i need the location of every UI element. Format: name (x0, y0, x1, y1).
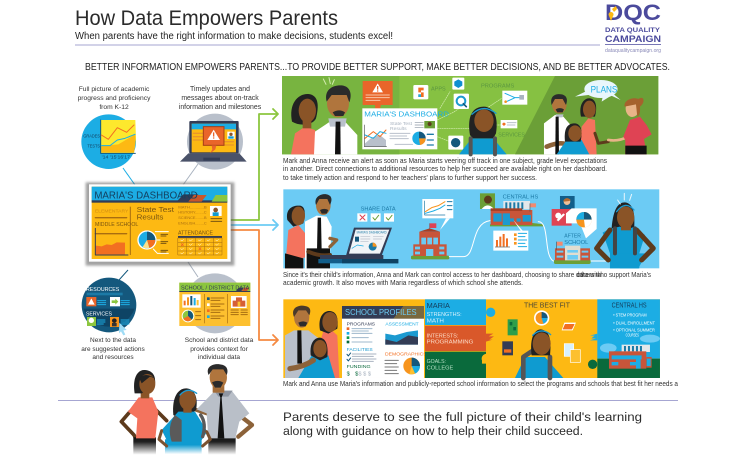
girl Maria (459, 107, 507, 154)
dashboard: Maria's dashboard: State Test (137, 205, 175, 214)
laptop (318, 228, 398, 263)
panel 1 caption: Mark and Anna receive an alert as soon as Maria starts veering off track in one subject, grade level expectations (283, 156, 607, 165)
dashboard: Maria's dashboard: SCIENCE........B (178, 216, 207, 220)
central hs profile: • STEM PROGRAM (613, 312, 647, 317)
central hs (480, 193, 543, 226)
share data (357, 207, 396, 222)
laptop: MARIA'S DASHBOARD (357, 231, 387, 235)
Maria profile puzzle pieces: COLLEGE (427, 365, 454, 371)
panel 2 caption: Since it's their child's information, Anna and Mark can control access to her dashboard, choosing to share data with (283, 270, 601, 279)
panel 3: school profiles and best fit (283, 299, 660, 378)
school profiles: SCHOOL PROFILES (345, 308, 417, 317)
icon: school district data (179, 273, 250, 333)
dashboard: Maria's dashboard: MIDDLE SCHOOL (95, 222, 138, 228)
school profiles: PROGRAMS (347, 321, 376, 327)
Maria profile puzzle pieces: INTERESTS: (427, 333, 458, 339)
icon: grades and tests chart: TESTS (87, 144, 100, 149)
resource icons (413, 78, 527, 150)
after school (552, 196, 597, 264)
girl (159, 388, 210, 455)
panel 1 caption (283, 156, 607, 182)
icon: resources and services: SERVICES (86, 311, 112, 317)
text: timely updates: Timely updates and (190, 86, 250, 93)
family illustration (121, 364, 252, 456)
resource labels (431, 84, 525, 138)
school profiles: $$ (347, 371, 359, 377)
icon: grades and tests chart (81, 114, 136, 169)
the best fit: THE BEST FIT (524, 303, 571, 310)
logo: Data Quality Campaign: CAMPAIGN (605, 34, 661, 44)
after school: SCHOOL (564, 240, 588, 246)
connector lines (119, 164, 198, 280)
icon: resources and services: RESOURCES (86, 287, 120, 293)
icon: grades and tests chart: GRADES (83, 134, 100, 139)
parents at laptop (285, 194, 337, 268)
panel 3 caption: Mark and Anna use Maria's information and publicly-reported school information to select the programs and schools that best fit her needs a (283, 379, 678, 388)
resource labels: APPS (431, 87, 446, 93)
text: full picture: Full picture of academic (79, 86, 150, 93)
speech bubble plans: PLANS (591, 84, 617, 94)
Maria profile puzzle pieces: GOALS: (427, 359, 446, 365)
text: timely updates: messages about on-track (181, 95, 259, 102)
text: school and district: provides context for (190, 346, 249, 353)
subtitle: When parents have the right information to make decisions, students excel! (75, 31, 393, 42)
closing statement: along with guidance on how to help their child succeed. (283, 424, 583, 438)
dashboard: Maria's dashboard: ATTENDANCE (178, 230, 213, 236)
dashboard: Maria's dashboard (86, 182, 234, 266)
panel 2 caption: others who support Maria's (577, 270, 651, 279)
text: full picture (78, 86, 151, 111)
dashboard: Maria's dashboard: MARIA'S DASHBOARD (94, 191, 198, 202)
arrow: orange to panel 3 (231, 230, 278, 345)
heading: better information: BETTER INFORMATION EMPOWERS PARENTS...TO PROVIDE BETTER SUPPORT, MAKE BETTER DECISIONS, AND BE BETTER ADVOCATES. (85, 62, 670, 73)
logo: Data Quality Campaign: dataqualitycampaign.org (605, 48, 661, 54)
panel 1 caption: to take timely action and respond to her teachers' plans to further support her success. (283, 173, 537, 182)
dashboard card: Results (390, 126, 407, 132)
closing statement (283, 410, 642, 438)
dashboard: Maria's dashboard: ENGLISH........C (178, 221, 207, 225)
icon: resources and services (82, 278, 136, 335)
central hs profile: • DUAL ENROLLMENT (613, 320, 655, 325)
the best fit (502, 303, 580, 378)
text: timely updates: information and milestones (179, 104, 262, 111)
school profiles (342, 306, 427, 378)
Maria profile puzzle pieces: PROGRAMMING (427, 339, 473, 345)
girl hands on hips (597, 193, 653, 268)
panel 1: alert and resources (282, 76, 658, 154)
title: How Data Empowers Parents (75, 7, 338, 30)
alert card (363, 81, 393, 130)
share data: SHARE DATA (361, 207, 396, 213)
man (197, 364, 252, 456)
icon: school district data: SCHOOL / DISTRICT DATA (181, 285, 250, 291)
woman Anna (291, 94, 320, 154)
text: timely updates (179, 86, 262, 111)
man Mark (314, 85, 357, 154)
dashboard: Maria's dashboard: Results (137, 212, 164, 221)
panel 1 caption: in another. Direct connections to additional resources to help her succeed are available right on her dashboard. (283, 164, 607, 173)
text: next to the data: and resources (92, 354, 134, 361)
resource labels: SERVICES (498, 132, 525, 138)
central hs profile (588, 299, 660, 378)
school profiles: FUNDING (347, 364, 371, 370)
text: next to the data (81, 337, 146, 361)
dashboard card: MARIA'S DASHBOARD (364, 109, 449, 118)
Maria profile puzzle pieces: MATH (427, 318, 444, 324)
chart bubble (422, 199, 453, 230)
parents and girl (285, 306, 339, 378)
family with teacher (544, 94, 652, 154)
speech bubble plans (575, 80, 621, 102)
after school: AFTER (564, 234, 581, 240)
text: school and district (185, 337, 254, 361)
elementary school building (411, 223, 449, 259)
central hs profile: • OPTIONAL SUMMER (613, 327, 655, 332)
text: full picture: progress and proficiency (78, 95, 151, 102)
school profiles: DEMOGRAPHICS (385, 351, 427, 357)
data card (493, 220, 528, 251)
dashboard card (362, 108, 449, 149)
Maria profile puzzle pieces (425, 299, 495, 378)
text: next to the data: Next to the data (90, 337, 136, 344)
text: full picture: from K-12 (99, 104, 129, 111)
Maria profile puzzle pieces: MARIA (427, 301, 450, 310)
school profiles: FACILITIES (347, 347, 373, 353)
panel 2 caption (283, 270, 651, 287)
resource labels: PROGRAMS (481, 84, 515, 90)
school profiles: $$$ (358, 371, 372, 377)
dashboard: Maria's dashboard: ELEMENTARY (95, 208, 128, 213)
logo: Data Quality Campaign (605, 0, 661, 54)
Maria profile puzzle pieces: STRENGTHS: (427, 312, 462, 318)
central hs: CENTRAL HS (503, 194, 539, 200)
school profiles: ASSESSMENT (385, 321, 419, 327)
text: school and district: School and district data (185, 337, 254, 344)
central hs profile: COURSES (626, 333, 639, 338)
text: school and district: individual data (198, 354, 240, 361)
dashboard: Maria's dashboard: MATH............B (178, 205, 207, 209)
icon: grades and tests chart: '14 '15'16'17 (102, 155, 131, 160)
logo: Data Quality Campaign: DQC (605, 0, 661, 25)
closing statement: Parents deserve to see the full picture of their child's learning (283, 410, 642, 424)
dashboard card: State Test (390, 121, 413, 127)
text: next to the data: are suggested actions (81, 346, 146, 353)
woman (121, 370, 167, 456)
arrow: green to panel 1 (231, 109, 278, 220)
dashboard: Maria's dashboard: HISTORY........C (178, 211, 207, 215)
panel 2: share data (283, 189, 659, 268)
arrow: blue to panel 2 (231, 220, 278, 230)
logo: Data Quality Campaign: DATA QUALITY (605, 27, 661, 34)
central hs profile: CENTRAL HS (612, 303, 647, 310)
icon: laptop alert (180, 114, 247, 170)
panel 2 caption: academic growth. It also moves with Maria regardless of which school she attends. (283, 278, 523, 287)
